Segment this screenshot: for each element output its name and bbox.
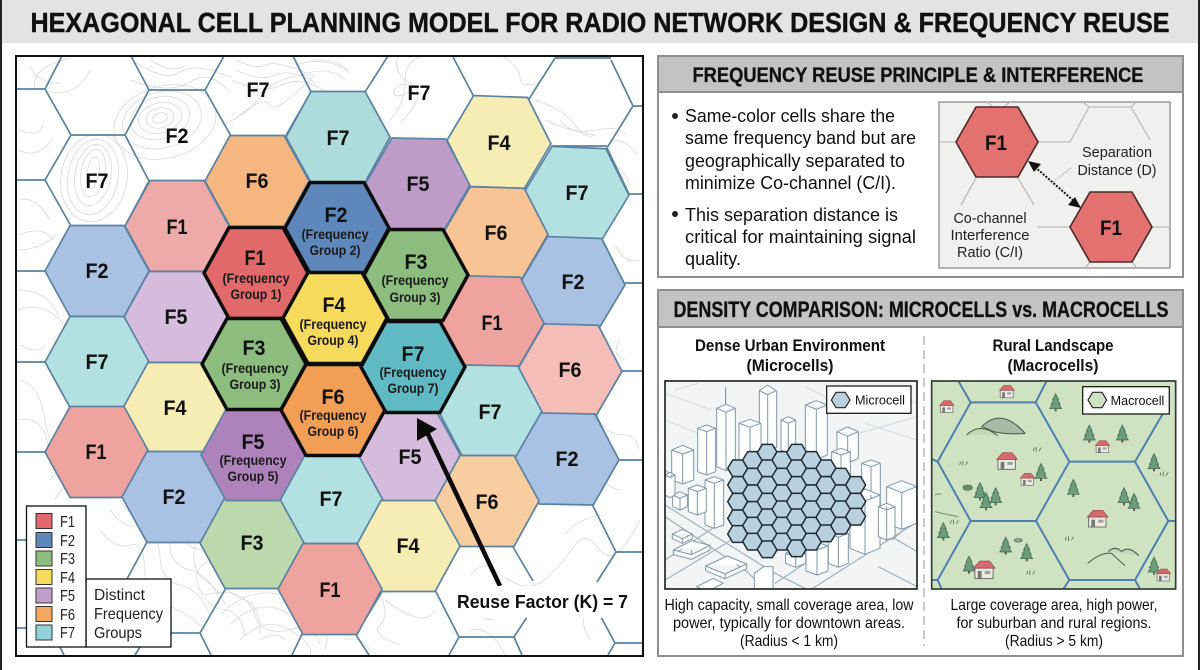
hex: F4 frequency group 4: F4 <box>322 294 346 317</box>
hex: F3 frequency group 3 <box>364 230 468 320</box>
hex: F7 outer: F7 <box>320 488 342 511</box>
hex: F1 outer: F1 <box>482 312 503 335</box>
hex: F4 outer <box>445 95 553 189</box>
trees <box>937 394 1160 575</box>
hex: F1 frequency group 1: (Frequency <box>222 270 290 286</box>
hex: F6 frequency group 6: Group 6) <box>308 423 358 439</box>
hex: F5 outer: F5 <box>398 446 422 469</box>
hex: F2 outer <box>519 236 627 330</box>
heading: frequency reuse: FREQUENCY REUSE PRINCIPLE & INTERFERENCE <box>692 64 1144 87</box>
hex: F2 frequency group 2: Group 2) <box>310 242 360 258</box>
hex: F7 outer <box>45 316 149 408</box>
text block: reuse bullets: minimize Co-channel (C/I). <box>685 173 896 193</box>
hex: F4 outer: F4 <box>396 535 420 558</box>
panel: frequency reuse principle <box>658 56 1183 277</box>
subheading: urban: Dense Urban Environment <box>695 336 885 355</box>
legend: frequency groups: F7 <box>60 625 75 642</box>
hex: F5 outer <box>365 138 471 230</box>
hex: F5 outer: F5 <box>406 173 430 196</box>
illustration: dense urban microcells <box>665 381 920 592</box>
hex: F1 frequency group 1 <box>204 228 308 318</box>
hex: F2 frequency group 2: (Frequency <box>302 226 369 242</box>
hex: F4 outer: F4 <box>488 132 511 155</box>
hex: F7 frequency group 7 <box>361 322 465 412</box>
label: separation distance: Separation <box>1082 144 1152 161</box>
hex: F7 outer <box>286 92 390 182</box>
hex: F3 frequency group 3: (Frequency <box>222 360 289 376</box>
legend: frequency groups: Distinct <box>94 587 146 604</box>
hex: F6 outer: F6 <box>476 491 498 514</box>
label: C/I ratio: Ratio (C/I) <box>957 244 1023 261</box>
legend: frequency groups: F6 <box>60 607 75 624</box>
callout: reuse factor <box>451 586 633 618</box>
hex: F4 frequency group 4 <box>283 272 387 364</box>
text block: reuse bullets: quality. <box>685 249 741 269</box>
legend: frequency groups: F5 <box>60 588 75 605</box>
hex: F6 frequency group 6: (Frequency <box>300 407 367 423</box>
hex: F5 outer <box>358 412 462 504</box>
hex: F7 frequency group 7: F7 <box>402 343 424 366</box>
hex: F7 outer <box>523 145 631 241</box>
hex: F7 frequency group 7: Group 7) <box>388 380 438 396</box>
cell labels on white hexes: F7 <box>86 170 108 193</box>
caption: rural: for suburban and rural regions. <box>956 615 1152 632</box>
caption: urban: power, typically for downtown areas. <box>673 615 905 632</box>
hex: F3 outer <box>200 498 304 588</box>
cell labels on white hexes: F7 <box>246 79 270 102</box>
text block: reuse bullets: critical for maintaining signal <box>685 227 916 247</box>
legend: frequency groups: Groups <box>94 625 142 642</box>
hex: F2 outer: F2 <box>86 260 108 283</box>
hex: F2 outer <box>45 226 149 316</box>
hex: F1 lower: F1 <box>1100 217 1122 240</box>
hex: F3 frequency group 3: F3 <box>242 337 266 360</box>
illustration: rural macrocells <box>932 381 1176 589</box>
hex: F5 frequency group 5: (Frequency <box>220 452 287 468</box>
hex: F3 frequency group 3: (Frequency <box>382 272 449 288</box>
legend: microcell <box>827 386 911 413</box>
diagram: co-channel separation <box>939 102 1170 268</box>
grass tufts and bushes <box>950 447 1168 575</box>
hex: F3 frequency group 3: Group 3) <box>390 289 440 305</box>
hex: F7 outer <box>437 365 543 457</box>
hex: F2 outer: F2 <box>556 448 578 471</box>
callout: reuse factor: Reuse Factor (K) = 7 <box>457 592 628 612</box>
hex: F3 frequency group 3: Group 3) <box>230 376 280 392</box>
cell labels on white hexes: F2 <box>166 125 188 148</box>
hex: F3 outer: F3 <box>240 532 264 555</box>
legend: microcell: Microcell <box>855 392 905 407</box>
hex: F6 outer: F6 <box>558 359 582 382</box>
legend: macrocell: Macrocell <box>1111 393 1164 408</box>
hex: F1 frequency group 1: Group 1) <box>230 286 282 302</box>
text block: reuse bullets: This separation distance is <box>685 205 898 225</box>
caption: urban <box>664 597 914 650</box>
hex: F2 outer <box>122 452 226 542</box>
label: C/I ratio: Co-channel <box>954 210 1026 227</box>
hex: F1 outer: F1 <box>320 579 341 602</box>
topographic contour lines <box>18 48 640 655</box>
hex: F4 frequency group 4: Group 4) <box>308 332 358 348</box>
legend: frequency groups: F1 <box>60 514 75 531</box>
hex: F6 outer <box>517 323 623 417</box>
hex: F6 frequency group 6: F6 <box>322 386 344 409</box>
hex: F2 frequency group 2: F2 <box>324 204 348 227</box>
hex: F1 upper: F1 <box>985 132 1007 155</box>
label: separation distance: Distance (D) <box>1078 162 1156 179</box>
hills <box>935 418 1139 566</box>
subheading: urban <box>695 336 885 375</box>
hex: F4 frequency group 4: (Frequency <box>300 316 367 332</box>
heading: frequency reuse <box>658 56 1183 92</box>
caption: urban: High capacity, small coverage area, low <box>664 597 914 614</box>
legend: frequency groups <box>26 506 171 647</box>
subheading: rural <box>992 336 1114 375</box>
hex: F1 outer <box>439 275 545 369</box>
hex: F4 outer <box>123 362 227 454</box>
hex: F2 outer: F2 <box>162 486 186 509</box>
houses <box>939 385 1171 581</box>
hex: F1 outer: F1 <box>86 441 107 464</box>
hex: F2 outer <box>514 413 620 505</box>
hex: F7 outer <box>279 454 383 546</box>
arrow: reuse factor pointer <box>417 418 500 586</box>
hex: F2 frequency group 2 <box>285 182 389 274</box>
hex: F5 frequency group 5 <box>201 410 305 500</box>
label: C/I ratio: Interference <box>950 227 1030 244</box>
microcell hex cluster <box>728 444 866 558</box>
panel: density comparison <box>658 290 1183 656</box>
legend: frequency groups: F4 <box>60 570 75 587</box>
text block: reuse bullets <box>672 106 916 269</box>
hex: F5 outer <box>124 272 228 362</box>
label: separation distance <box>1078 144 1156 179</box>
subheading: rural: (Macrocells) <box>1008 356 1098 375</box>
text block: reuse bullets: same frequency band but are <box>685 128 916 148</box>
hex: F1 lower <box>1070 192 1152 262</box>
hex: F4 outer <box>356 500 460 592</box>
hex: F4 outer: F4 <box>164 397 187 420</box>
panel: hexagonal cell map <box>16 48 643 656</box>
hex: F7 outer: F7 <box>326 127 350 150</box>
caption: rural <box>950 597 1158 650</box>
city streets <box>665 383 920 590</box>
hex: F7 frequency group 7: (Frequency <box>380 364 447 380</box>
hex: F6 outer <box>205 136 309 226</box>
legend: frequency groups: F2 <box>60 533 75 550</box>
caption: urban: (Radius < 1 km) <box>740 633 838 650</box>
central cluster: frequency groups <box>201 182 468 500</box>
text block: reuse bullets: geographically separated to <box>685 151 905 171</box>
hex: F1 upper <box>956 107 1038 177</box>
hex: F3 frequency group 3: F3 <box>404 251 428 274</box>
hex: F6 outer: F6 <box>246 170 268 193</box>
cell labels on white hexes <box>86 79 430 193</box>
cell labels on white hexes: F7 <box>408 82 430 105</box>
legend: frequency groups: F3 <box>60 551 75 568</box>
subheading: rural: Rural Landscape <box>992 336 1114 355</box>
label: C/I ratio <box>950 210 1030 261</box>
hex: F6 outer: F6 <box>484 222 508 245</box>
hex: F6 outer <box>443 186 549 280</box>
heading: density comparison <box>658 290 1183 327</box>
hex: F1 outer: F1 <box>166 216 188 239</box>
city buildings <box>665 385 917 592</box>
hex: F5 outer: F5 <box>164 306 188 329</box>
hex: F7 outer: F7 <box>566 182 588 205</box>
hex: F1 outer <box>45 406 149 498</box>
hex: F7 outer: F7 <box>86 351 108 374</box>
caption: rural: (Radius > 5 km) <box>1005 633 1103 650</box>
legend: frequency groups: Frequency <box>94 606 163 623</box>
text block: reuse bullets: Same-color cells share the <box>685 106 895 126</box>
hex: F1 outer <box>278 544 382 634</box>
hex: F2 outer: F2 <box>562 271 584 294</box>
hex: F5 frequency group 5: Group 5) <box>228 468 278 484</box>
hex: F6 outer <box>435 456 539 546</box>
legend: macrocell <box>1083 387 1169 414</box>
macrocell hex boundaries <box>932 381 1176 589</box>
caption: rural: Large coverage area, high power, <box>950 597 1158 614</box>
empty background cell edges <box>16 56 642 655</box>
hex: F7 outer: F7 <box>478 401 502 424</box>
hex: F1 outer <box>125 180 229 272</box>
arrow: separation distance <box>1028 161 1081 208</box>
subheading: urban: (Microcells) <box>746 356 834 375</box>
hex: F5 frequency group 5: F5 <box>242 431 265 454</box>
hex: F3 frequency group 3 <box>202 318 306 410</box>
hex: F1 frequency group 1: F1 <box>244 247 266 270</box>
hex: F6 frequency group 6 <box>281 364 385 456</box>
